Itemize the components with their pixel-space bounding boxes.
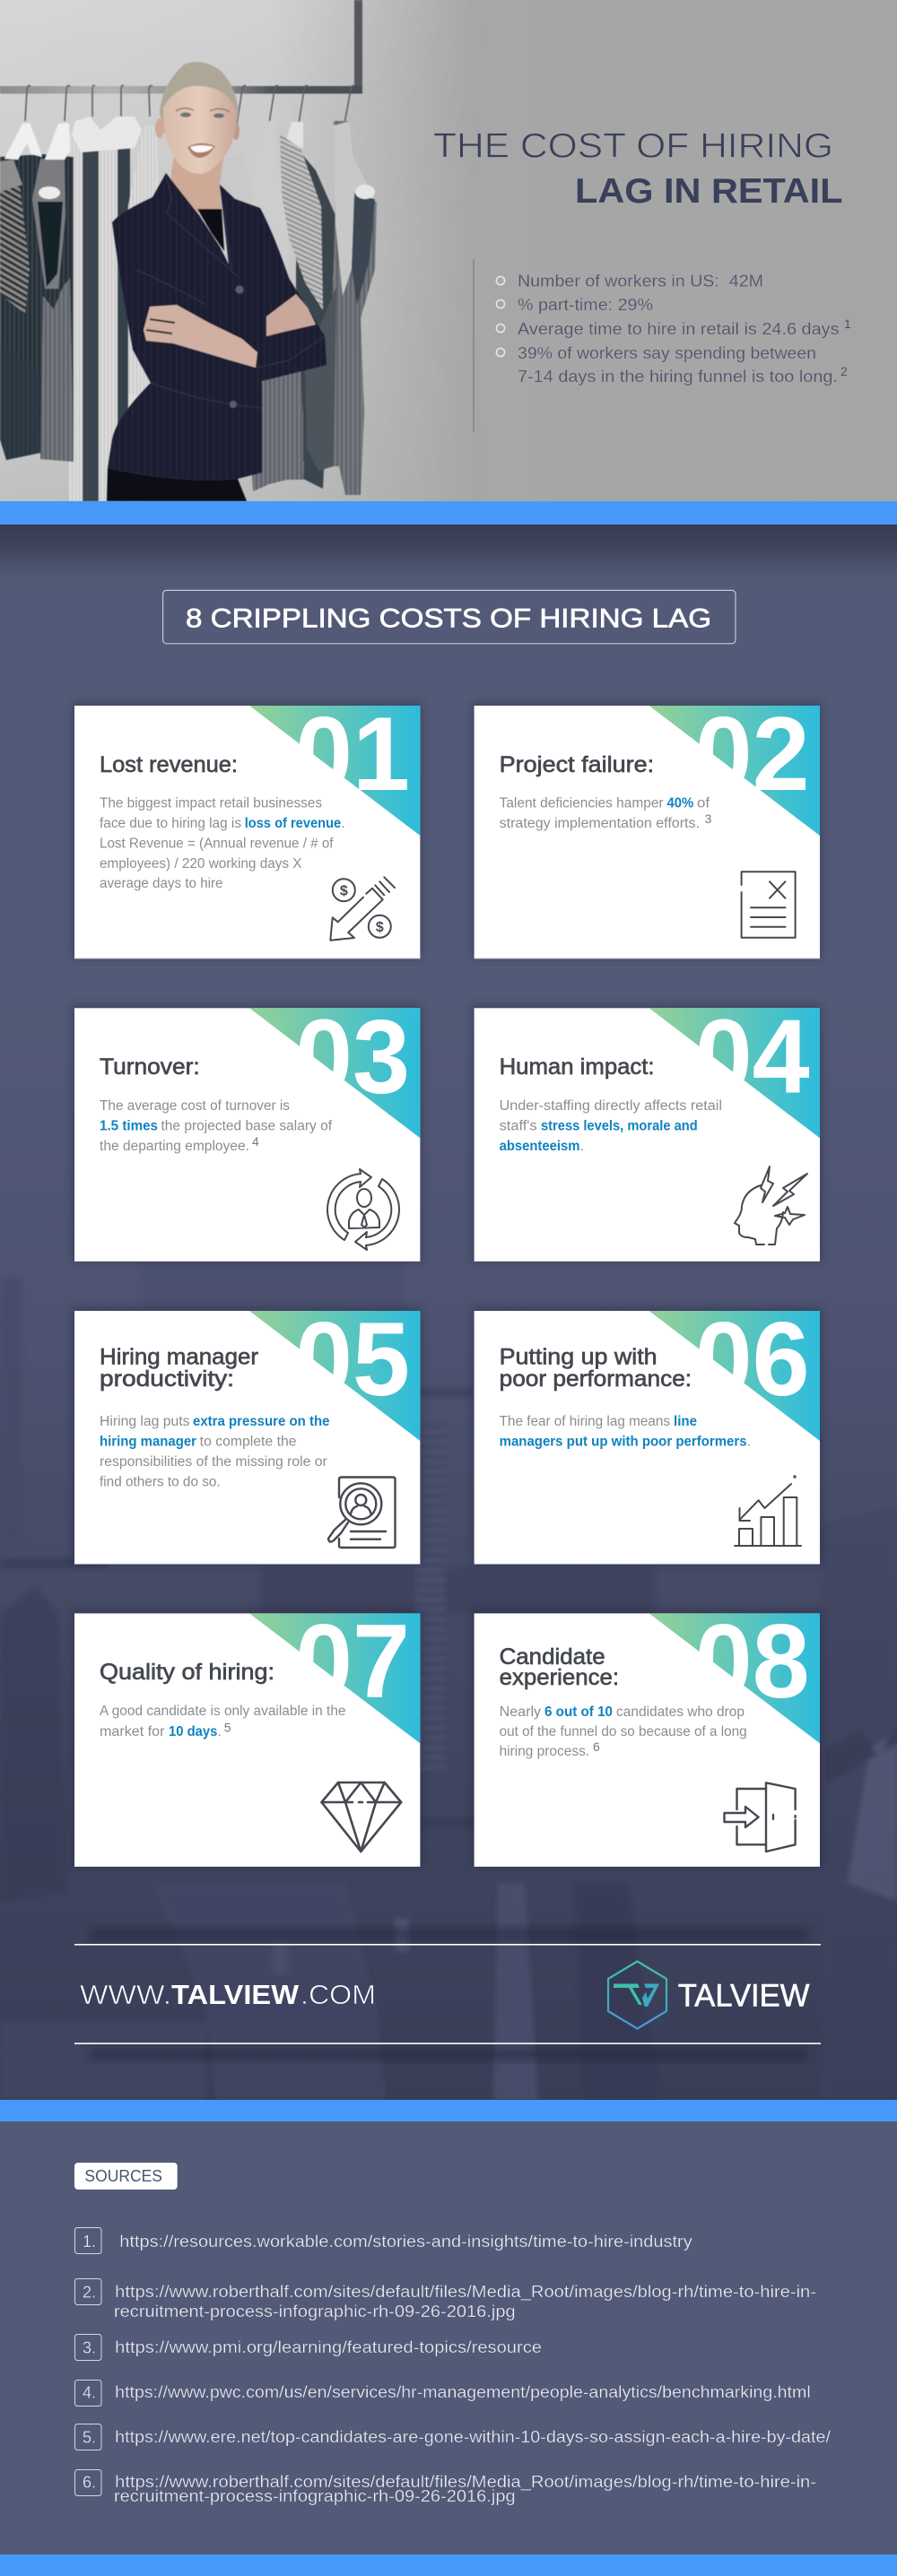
body text: The fear of hiring lag means — [500, 1414, 670, 1429]
card 04: human impact: Human impact: — [500, 1054, 655, 1080]
main panel background with faded store scene — [0, 525, 897, 2100]
body text: market for — [100, 1724, 165, 1739]
section heading — [163, 590, 736, 644]
stats list: Average time to hire in retail is 24.6 days — [518, 319, 840, 338]
jacket — [108, 173, 327, 481]
stats list: Number of workers in US: 42M — [518, 272, 763, 291]
skirt — [107, 468, 247, 501]
card 01: lost revenue — [73, 695, 422, 959]
card title — [500, 1644, 619, 1690]
card 02: project failure: Project failure: — [500, 752, 654, 777]
body text: Under-staffing directly affects retail — [500, 1098, 722, 1114]
source 3 — [75, 2335, 542, 2360]
card 02: project failure — [473, 695, 822, 959]
body text: 6 out of 10 — [544, 1704, 613, 1720]
sources panel — [0, 2121, 897, 2554]
body text: strategy implementation efforts. — [500, 816, 700, 831]
card 05: hiring manager productivity: 05 — [295, 1300, 410, 1418]
card 01: lost revenue: 01 — [295, 695, 410, 812]
title: LAG IN RETAIL — [575, 172, 843, 211]
website url: WWW. — [80, 1979, 171, 2010]
grey vest top — [32, 159, 65, 289]
card title — [100, 1345, 258, 1392]
striped top — [0, 185, 30, 314]
icon: falling money arrow — [330, 877, 395, 941]
card title — [500, 1345, 692, 1392]
body text: of — [697, 796, 710, 811]
body text: Nearly — [500, 1704, 541, 1720]
body text: managers put up with poor performers — [500, 1435, 747, 1449]
body text: 4 — [252, 1134, 259, 1149]
source 4: https://www.pwc.com/us/en/services/hr-management/people-analytics/benchmarking.html — [115, 2383, 811, 2401]
source 3: 3. — [83, 2338, 96, 2356]
stats list: 7-14 days in the hiring funnel is too long. — [518, 367, 838, 386]
sources label: SOURCES — [84, 2167, 162, 2185]
card 08: candidate experience — [473, 1602, 822, 1867]
website url — [80, 1979, 376, 2010]
card title: Putting up with — [500, 1345, 658, 1370]
body text: 6 — [593, 1739, 600, 1754]
photo: smiling businesswoman — [107, 62, 327, 501]
card title: Hiring manager — [100, 1345, 258, 1370]
stats list — [496, 272, 851, 386]
title — [433, 126, 843, 211]
card title: Candidate — [500, 1644, 605, 1670]
body text: line — [674, 1414, 697, 1429]
hair — [160, 62, 239, 134]
card 04: human impact — [473, 997, 822, 1262]
body text: 10 days — [169, 1724, 217, 1739]
icon: stressed head with lightning — [735, 1167, 807, 1245]
blue band — [0, 2100, 897, 2121]
body text: 5 — [224, 1721, 231, 1735]
body text: . — [341, 816, 345, 831]
left pale trousers — [69, 134, 83, 501]
body text — [100, 1704, 346, 1739]
source 1: 1. — [83, 2233, 96, 2251]
card 08: candidate experience: 08 — [695, 1602, 810, 1720]
body text: hiring manager — [100, 1435, 196, 1449]
card title: productivity: — [100, 1366, 234, 1392]
icon: falling money arrow: $ — [340, 884, 348, 898]
website url: .COM — [300, 1979, 376, 2010]
section heading: 8 CRIPPLING COSTS OF HIRING LAG — [186, 603, 711, 633]
black blouse — [197, 209, 224, 251]
body text: to complete the — [200, 1435, 296, 1449]
body text: Talent deficiencies hamper — [500, 796, 664, 811]
body text: . — [579, 1139, 584, 1154]
source 6 — [75, 2469, 816, 2505]
source 6: 6. — [83, 2473, 96, 2491]
body text — [100, 796, 345, 891]
body text: . — [747, 1435, 751, 1449]
hero panel: photo and title — [0, 0, 897, 501]
divider line — [474, 259, 475, 432]
icon: candidate search document — [328, 1478, 395, 1548]
card 03: turnover — [73, 997, 422, 1262]
body text — [500, 1704, 747, 1759]
body text: candidates who drop — [616, 1704, 745, 1720]
source 4 — [75, 2380, 811, 2407]
blue band — [0, 501, 897, 525]
body text — [500, 1414, 751, 1449]
source 3: https://www.pmi.org/learning/featured-topics/resource — [115, 2338, 542, 2356]
crossed hands — [266, 294, 316, 336]
body text: the departing employee. — [100, 1139, 249, 1154]
logo: Talview — [608, 1962, 809, 2028]
body text — [100, 1414, 330, 1490]
body text — [500, 1098, 722, 1154]
card 07: quality of hiring — [73, 1602, 422, 1867]
source 5: https://www.ere.net/top-candidates-are-gone-within-10-days-so-assign-each-a-hire-by-date/ — [115, 2428, 831, 2446]
source 6: recruitment-process-infographic-rh-09-26-2016.jpg — [114, 2487, 516, 2505]
body text: 1.5 times — [100, 1119, 158, 1133]
source 1: https://resources.workable.com/stories-and-insights/time-to-hire-industry — [119, 2233, 692, 2251]
source 2: recruitment-process-infographic-rh-09-26-2016.jpg — [114, 2303, 516, 2320]
stats list: 2 — [840, 364, 848, 378]
body text: The biggest impact retail businesses — [100, 796, 322, 811]
card 06: putting up with poor performance — [473, 1300, 822, 1564]
body text: average days to hire — [100, 876, 222, 891]
body text — [100, 1098, 333, 1154]
icon: diamond — [321, 1782, 401, 1852]
neck — [170, 148, 224, 213]
stats list: 1 — [844, 317, 851, 331]
face — [163, 86, 237, 174]
footer brand strip — [74, 1928, 821, 2060]
right garments — [296, 152, 335, 489]
body text: loss of revenue — [245, 816, 342, 831]
card 02: project failure: 02 — [695, 695, 810, 812]
source 2 — [75, 2279, 816, 2320]
source 2: 2. — [83, 2283, 96, 2301]
icon: declining bar chart — [735, 1476, 801, 1546]
source 6: https://www.roberthalf.com/sites/default/files/Media_Root/images/blog-rh/time-to-hire-in- — [115, 2473, 816, 2492]
body text: extra pressure on the — [193, 1414, 330, 1429]
card title: experience: — [500, 1665, 619, 1690]
body text: the projected base salary of — [161, 1119, 333, 1133]
body text: The average cost of turnover is — [100, 1098, 290, 1114]
sources label — [74, 2163, 178, 2190]
body text: A good candidate is only available in the — [100, 1704, 346, 1719]
body text: hiring process. — [500, 1744, 589, 1759]
card title: poor performance: — [500, 1366, 692, 1392]
card 06: putting up with poor performance: 06 — [695, 1300, 810, 1418]
source 5: 5. — [83, 2428, 96, 2446]
body text: 3 — [705, 811, 712, 826]
website url: TALVIEW — [171, 1979, 300, 2010]
card 03: turnover: Turnover: — [100, 1054, 200, 1080]
photo: clothes rack — [0, 0, 377, 501]
card 07: quality of hiring: Quality of hiring: — [100, 1660, 274, 1685]
card 04: human impact: 04 — [695, 997, 810, 1115]
body text — [500, 796, 712, 831]
card 07: quality of hiring: 07 — [295, 1602, 410, 1720]
body text: out of the funnel do so because of a long — [500, 1724, 747, 1739]
icon: failed document — [742, 872, 796, 938]
title: THE COST OF HIRING — [433, 126, 833, 165]
body text: 40% — [667, 796, 693, 811]
source 2: https://www.roberthalf.com/sites/default/files/Media_Root/images/blog-rh/time-to-hire-in- — [115, 2283, 816, 2302]
body text: Lost Revenue = (Annual revenue / # of — [100, 836, 334, 852]
body text: staff's — [500, 1119, 537, 1133]
body text: absenteeism — [500, 1139, 579, 1154]
white hangers — [4, 123, 42, 160]
stats list: 39% of workers say spending between — [518, 343, 816, 362]
buttons — [235, 285, 244, 294]
icon: falling money arrow: $ — [376, 920, 384, 935]
body text: stress levels, morale and — [541, 1119, 698, 1133]
bullets — [496, 276, 505, 357]
body text: responsibilities of the missing role or — [100, 1454, 327, 1470]
card 01: lost revenue: Lost revenue: — [100, 752, 238, 777]
source 5 — [75, 2424, 831, 2450]
bottom blue band — [0, 2554, 897, 2576]
card 03: turnover: 03 — [295, 997, 410, 1115]
icon: exit door — [725, 1782, 796, 1852]
source 4: 4. — [83, 2383, 96, 2401]
source 1 — [75, 2227, 692, 2254]
body text: employees) / 220 working days X — [100, 856, 302, 872]
left dark garment — [0, 154, 74, 462]
stats list: % part-time: 29% — [518, 295, 653, 314]
body text: Hiring lag puts — [100, 1414, 190, 1429]
body text: . — [217, 1724, 222, 1739]
body text: find others to do so. — [100, 1474, 221, 1490]
icon: person in rotating arrows — [327, 1169, 399, 1250]
logo: Talview: TALVIEW — [678, 1979, 809, 2014]
card 05: hiring manager productivity — [73, 1300, 422, 1564]
body text: face due to hiring lag is — [100, 816, 241, 831]
